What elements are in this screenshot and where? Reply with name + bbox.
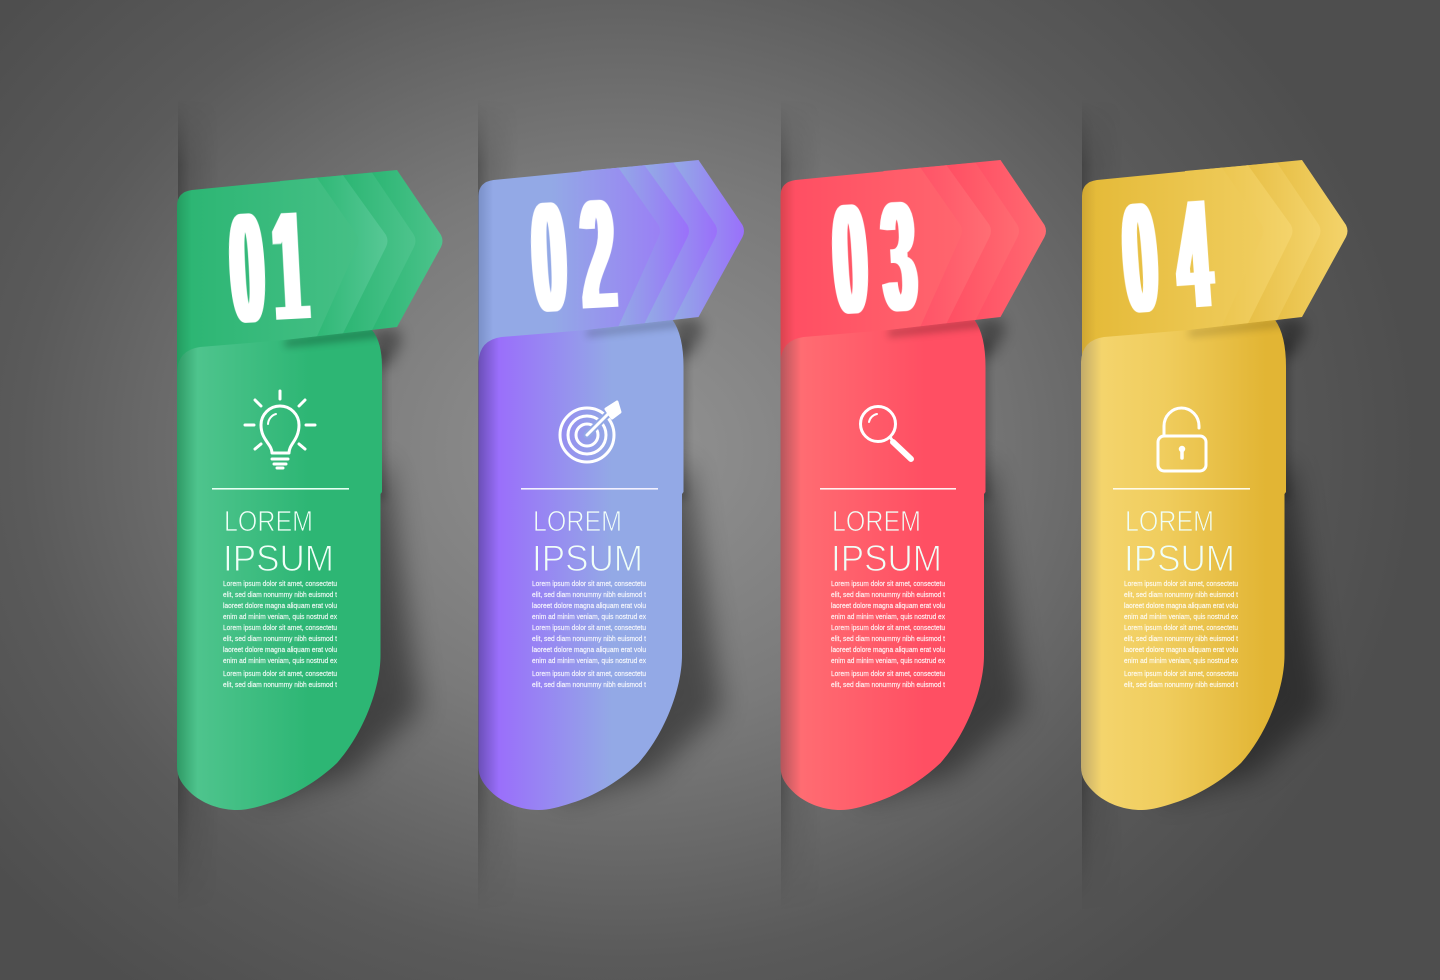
body text: elit, sed diam nonummy nibh euismod t [532, 590, 646, 599]
body text: elit, sed diam nonummy nibh euismod t [1124, 680, 1238, 689]
card 04 ribbon shadow on body [1188, 320, 1280, 339]
divider [1113, 488, 1250, 490]
body text: laoreet dolore magna aliquam erat volu [1124, 601, 1238, 610]
body text: Lorem ipsum dolor sit amet, consectetu [831, 623, 945, 632]
divider [820, 488, 956, 490]
card 04 body shadow [1144, 318, 1324, 800]
card 02 ribbon shadow on body [584, 320, 678, 340]
body text [223, 579, 337, 689]
body text: elit, sed diam nonummy nibh euismod t [831, 634, 945, 643]
card 04 body [1081, 320, 1286, 810]
body text: elit, sed diam nonummy nibh euismod t [1124, 634, 1238, 643]
body text: Lorem ipsum dolor sit amet, consectetu [1124, 623, 1238, 632]
body text: elit, sed diam nonummy nibh euismod t [223, 590, 337, 599]
card 01 ribbon shadow on body [282, 330, 378, 350]
body text: Lorem ipsum dolor sit amet, consectetu [532, 579, 646, 588]
body text: laoreet dolore magna aliquam erat volu [831, 645, 945, 654]
body text: Lorem ipsum dolor sit amet, consectetu [223, 669, 337, 678]
heading: lorem ipsum: IPSUM [1124, 537, 1235, 579]
number 03: 03 [829, 166, 937, 350]
card 03 ribbon with arrow [780, 160, 1046, 362]
body text [1124, 579, 1238, 689]
heading: lorem ipsum: LOREM [1125, 506, 1214, 538]
card 02 body [478, 320, 684, 810]
body text: laoreet dolore magna aliquam erat volu [831, 601, 945, 610]
body text: elit, sed diam nonummy nibh euismod t [223, 680, 337, 689]
body text: laoreet dolore magna aliquam erat volu [223, 645, 337, 654]
card 01 body shadow [240, 328, 420, 800]
number 04: 04 [1118, 163, 1237, 349]
heading: lorem ipsum: IPSUM [532, 537, 643, 579]
card 02 body shadow [542, 318, 722, 800]
heading: lorem ipsum: LOREM [224, 506, 313, 538]
heading: lorem ipsum [532, 506, 643, 579]
icon: padlock [1158, 408, 1206, 471]
icon: target with dart [560, 402, 620, 462]
body text: elit, sed diam nonummy nibh euismod t [223, 634, 337, 643]
body text: Lorem ipsum dolor sit amet, consectetu [1124, 669, 1238, 678]
body text: enim ad minim veniam, quis nostrud ex [831, 656, 945, 665]
number 01: 01 [226, 176, 321, 359]
card 03 body [780, 320, 986, 810]
heading: lorem ipsum [831, 506, 942, 579]
panel: card 03 red [780, 160, 1046, 810]
body text: enim ad minim veniam, quis nostrud ex [831, 612, 945, 621]
card 01 body [177, 330, 382, 810]
card 02 ribbon with arrow [478, 160, 744, 362]
icon: magnifying glass [860, 406, 911, 459]
body text [831, 579, 945, 689]
body text: laoreet dolore magna aliquam erat volu [532, 601, 646, 610]
heading: lorem ipsum: LOREM [533, 506, 622, 538]
body text [532, 579, 646, 689]
body text: Lorem ipsum dolor sit amet, consectetu [831, 579, 945, 588]
body text: elit, sed diam nonummy nibh euismod t [831, 680, 945, 689]
body text: laoreet dolore magna aliquam erat volu [532, 645, 646, 654]
heading: lorem ipsum [223, 506, 334, 579]
body text: elit, sed diam nonummy nibh euismod t [532, 680, 646, 689]
heading: lorem ipsum [1124, 506, 1235, 579]
body text: Lorem ipsum dolor sit amet, consectetu [223, 579, 337, 588]
body text: elit, sed diam nonummy nibh euismod t [831, 590, 945, 599]
body text: enim ad minim veniam, quis nostrud ex [532, 612, 646, 621]
icon: light bulb [245, 391, 315, 468]
heading: lorem ipsum: IPSUM [223, 537, 334, 579]
body text: Lorem ipsum dolor sit amet, consectetu [532, 623, 646, 632]
heading: lorem ipsum: LOREM [832, 506, 921, 538]
panel: card 02 purple [478, 160, 744, 810]
body text: Lorem ipsum dolor sit amet, consectetu [1124, 579, 1238, 588]
number 02: 02 [528, 164, 636, 348]
body text: enim ad minim veniam, quis nostrud ex [223, 612, 337, 621]
panel: card 01 green [177, 170, 442, 810]
body text: enim ad minim veniam, quis nostrud ex [532, 656, 646, 665]
body text: Lorem ipsum dolor sit amet, consectetu [532, 669, 646, 678]
body text: enim ad minim veniam, quis nostrud ex [1124, 656, 1238, 665]
body text: elit, sed diam nonummy nibh euismod t [1124, 590, 1238, 599]
panel: card 04 yellow [1081, 160, 1348, 810]
body text: elit, sed diam nonummy nibh euismod t [532, 634, 646, 643]
card 03 body shadow [844, 318, 1024, 800]
vertical shadow bands [178, 100, 1122, 910]
body text: laoreet dolore magna aliquam erat volu [1124, 645, 1238, 654]
divider [521, 488, 658, 490]
body text: Lorem ipsum dolor sit amet, consectetu [831, 669, 945, 678]
body text: enim ad minim veniam, quis nostrud ex [223, 656, 337, 665]
card 01 ribbon with arrow [177, 170, 442, 372]
body text: enim ad minim veniam, quis nostrud ex [1124, 612, 1238, 621]
divider [212, 488, 349, 490]
card 04 ribbon with arrow [1082, 160, 1348, 362]
card 03 ribbon shadow on body [886, 320, 980, 340]
body text: Lorem ipsum dolor sit amet, consectetu [223, 623, 337, 632]
body text: laoreet dolore magna aliquam erat volu [223, 601, 337, 610]
heading: lorem ipsum: IPSUM [831, 537, 942, 579]
